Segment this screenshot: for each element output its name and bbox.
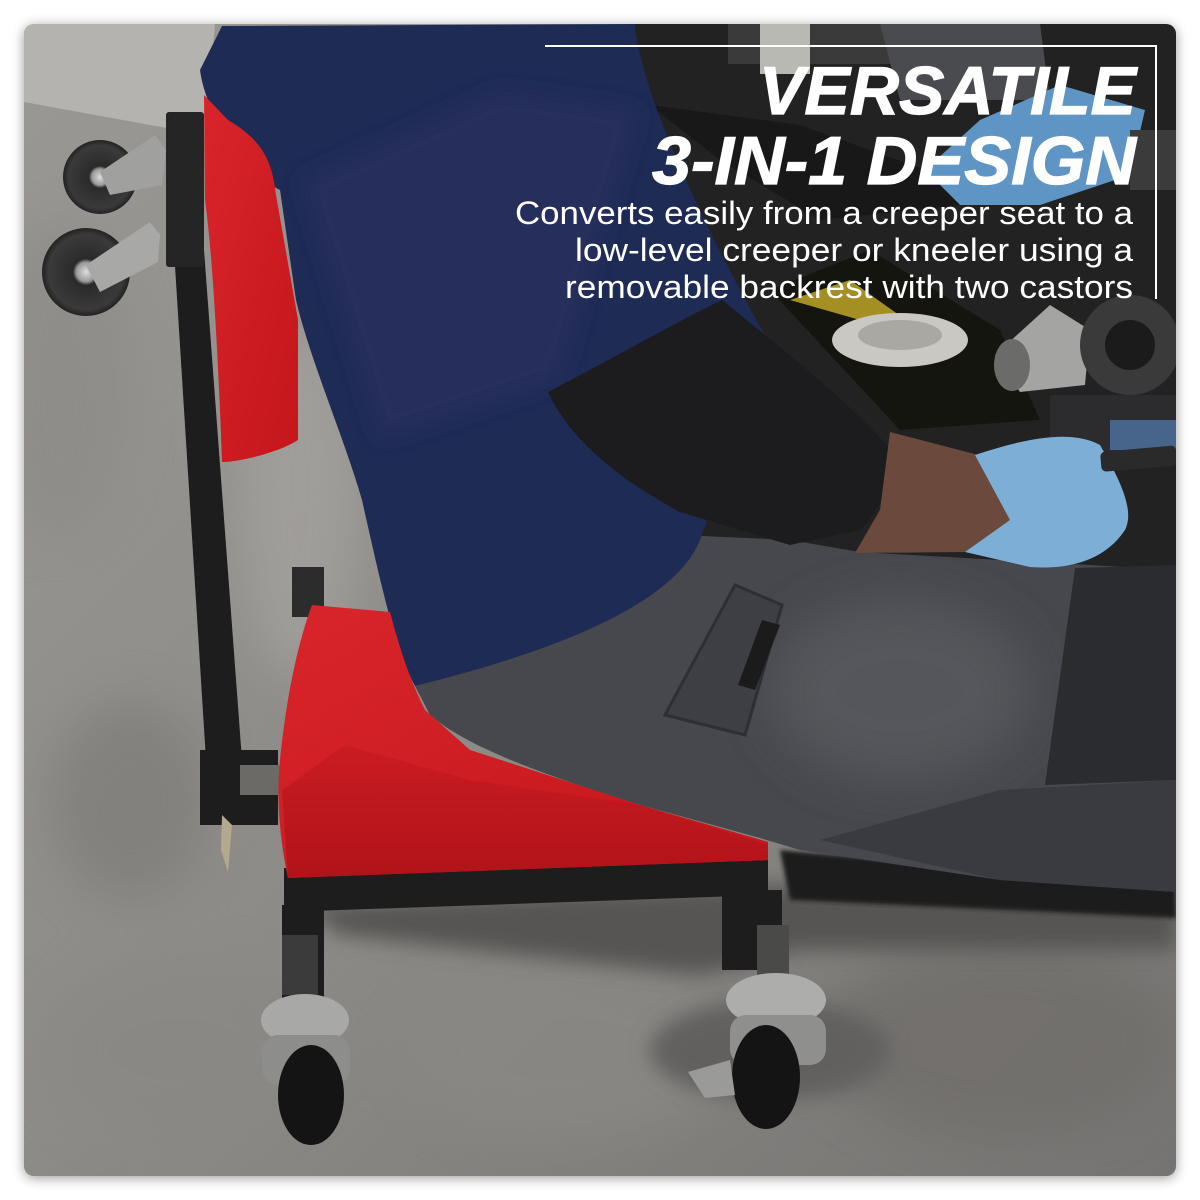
description text: Converts easily from a creeper seat to a	[515, 195, 1133, 231]
legs	[282, 905, 324, 998]
description text	[515, 195, 1133, 305]
white ashtray part	[832, 313, 968, 367]
trouser highlight	[778, 605, 1022, 775]
forearm	[855, 432, 1012, 553]
backrest cushion	[204, 95, 298, 462]
description text: removable backrest with two castors	[565, 269, 1133, 305]
caster shadow	[650, 1000, 890, 1100]
text frame lines	[545, 45, 1157, 299]
cargo pocket	[665, 585, 782, 735]
gear housing	[1080, 295, 1180, 395]
heading: 3-IN-1 DESIGN	[652, 123, 1138, 199]
description text: low-level creeper or kneeler using a	[575, 232, 1133, 268]
shirt	[200, 24, 770, 686]
heading	[652, 53, 1139, 199]
seat cushion	[278, 605, 768, 878]
chrome part	[995, 305, 1090, 392]
trousers	[415, 535, 1176, 892]
dark strip under thigh	[780, 850, 1176, 918]
black undersleeve	[548, 300, 804, 545]
front castors	[261, 925, 826, 1145]
shadow under seat	[300, 885, 1176, 975]
seat rail	[284, 860, 768, 912]
floor stains	[56, 338, 1146, 1120]
heading: VERSATILE	[759, 53, 1139, 129]
upright post	[174, 250, 242, 760]
creeper frame	[166, 112, 782, 1015]
mechanic figure	[200, 24, 1177, 892]
blue glove	[965, 437, 1128, 568]
hitch pin	[221, 815, 232, 872]
engine background	[630, 24, 1180, 600]
engine glove top	[925, 85, 1145, 205]
darker knee panel	[1045, 565, 1176, 785]
wall at top left	[24, 24, 215, 135]
shirt highlight	[318, 104, 622, 422]
back castors	[42, 135, 166, 316]
